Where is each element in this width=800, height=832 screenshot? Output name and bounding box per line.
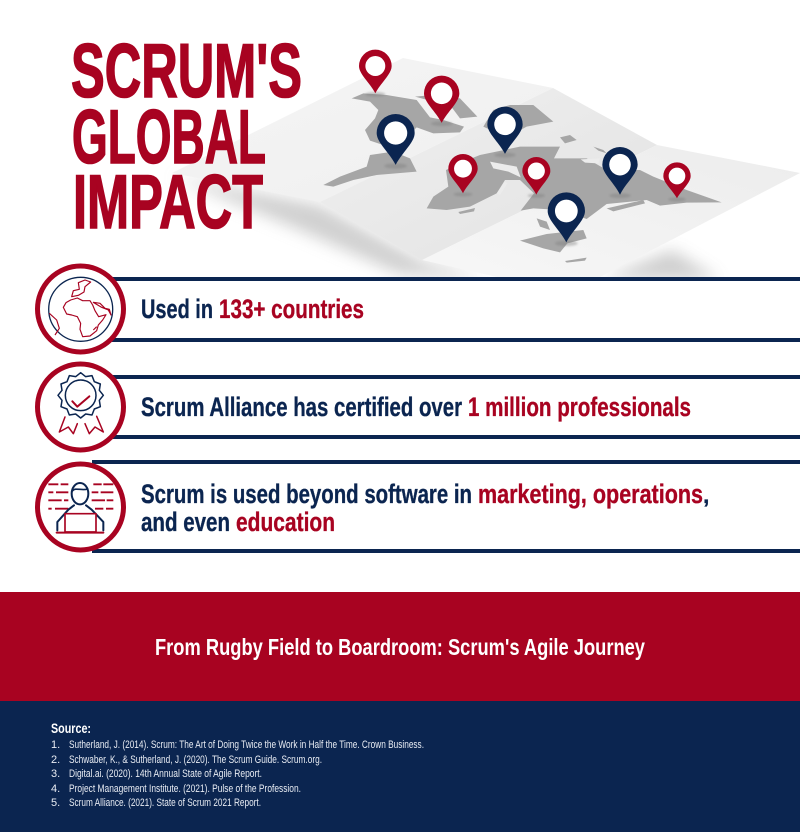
- map pins: [359, 50, 691, 242]
- map continents: [323, 92, 722, 263]
- pin ground shadows: [365, 92, 686, 246]
- pin navy 4: [548, 192, 585, 242]
- icon: certified badge: [38, 364, 124, 450]
- banner: [0, 592, 800, 701]
- row text: beyond software: marketing, operations: [478, 479, 703, 509]
- icon: globe: [38, 266, 124, 352]
- source list: Schwaber, K., & Sutherland, J. (2020). The Scrum Guide. Scrum.org.: [69, 754, 322, 766]
- source list: 5.: [51, 797, 60, 809]
- title: IMPACT: [73, 160, 263, 245]
- source list: Sutherland, J. (2014). Scrum: The Art of Doing Twice the Work in Half the Time. Crown Business.: [69, 739, 424, 751]
- row: countries: [38, 266, 800, 352]
- pin red 1: [359, 50, 392, 93]
- pin navy 2: [487, 107, 523, 154]
- pin red 2: [424, 76, 459, 123]
- row text: countries: Used in: [141, 294, 213, 324]
- icon: person at laptop: [38, 464, 124, 550]
- row text: beyond software: Scrum is used beyond software in: [141, 479, 472, 509]
- title: SCRUM'S: [71, 29, 302, 114]
- banner text: From Rugby Field to Boardroom: Scrum's Agile Journey: [155, 634, 645, 660]
- source list: 3.: [51, 768, 60, 780]
- source panel: [0, 701, 800, 832]
- row text: certified: Scrum Alliance has certified over: [141, 392, 462, 422]
- source list: Project Management Institute. (2021). Pulse of the Profession.: [69, 783, 301, 795]
- row text: beyond software: [141, 479, 709, 537]
- source heading: Source:: [51, 720, 91, 736]
- row text: countries: [141, 294, 364, 324]
- row text: certified: 1 million professionals: [468, 392, 691, 422]
- pin red 5: [663, 162, 691, 198]
- title: GLOBAL: [72, 95, 266, 180]
- row: certified: [38, 364, 800, 450]
- pin navy 3: [602, 147, 638, 195]
- row text: beyond software: ,: [703, 482, 709, 508]
- inland seas: [490, 158, 600, 195]
- pin red 3: [448, 154, 478, 193]
- pin red 4: [522, 157, 550, 195]
- row text: beyond software: education: [236, 507, 335, 537]
- source list: 1.: [51, 739, 60, 751]
- row text: countries: 133+ countries: [219, 294, 364, 324]
- source list: [51, 739, 424, 809]
- row: beyond software: [38, 460, 800, 553]
- title: [71, 29, 302, 245]
- pin navy 1: [377, 114, 415, 165]
- row text: beyond software: and even: [141, 507, 230, 537]
- source list: Digital.ai. (2020). 14th Annual State of Agile Report.: [69, 768, 262, 780]
- source list: 4.: [51, 783, 60, 795]
- folded world map: [172, 58, 800, 280]
- source list: Scrum Alliance. (2021). State of Scrum 2021 Report.: [69, 797, 261, 809]
- white area under map: [0, 277, 800, 592]
- source list: 2.: [51, 754, 60, 766]
